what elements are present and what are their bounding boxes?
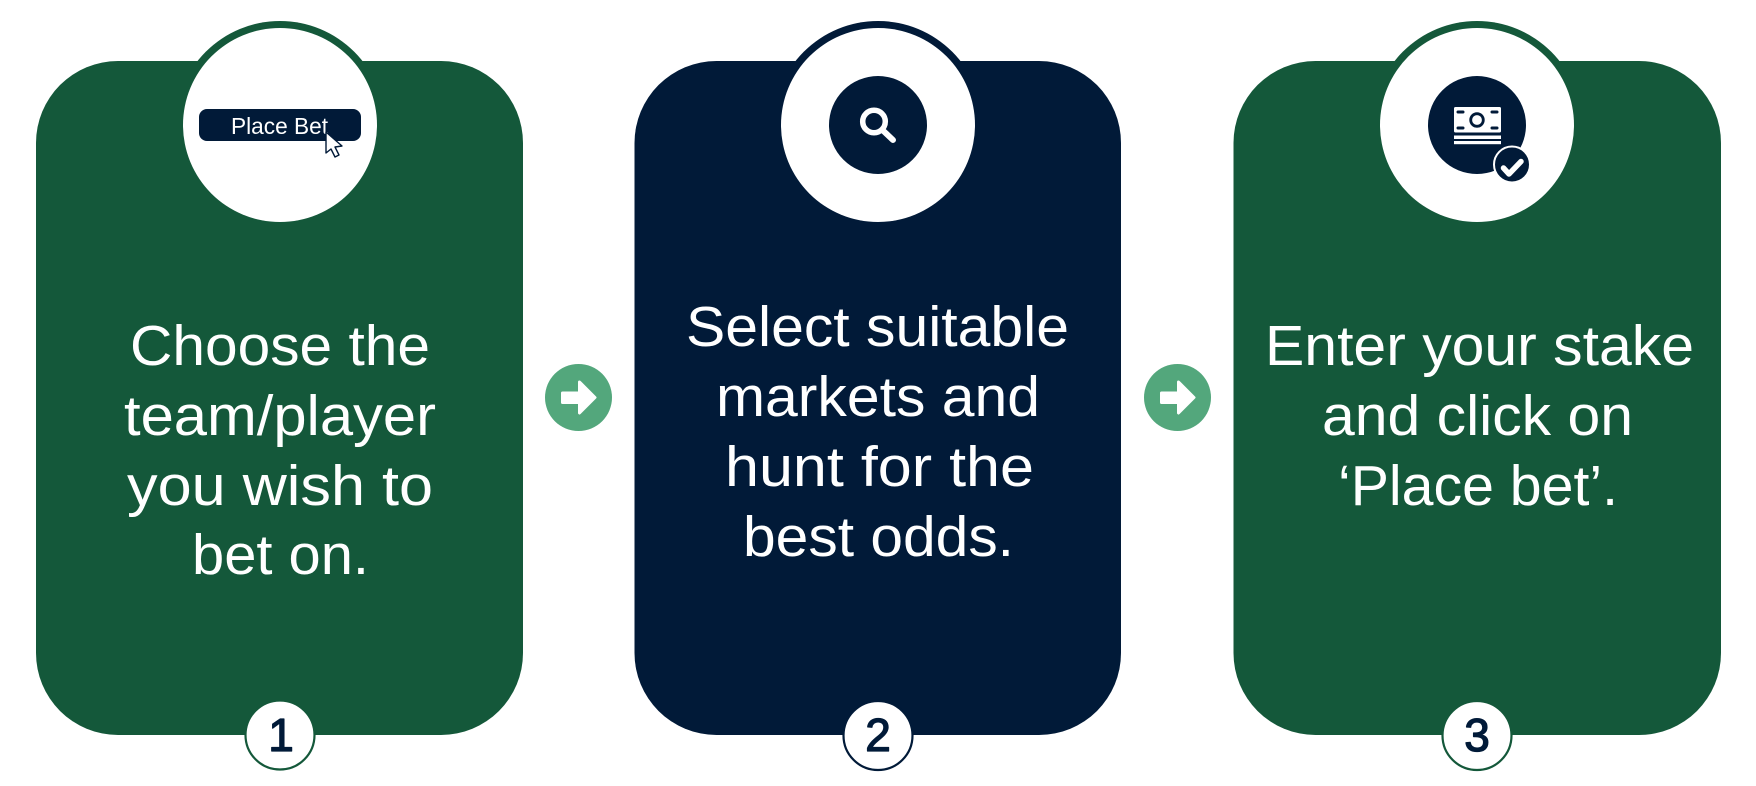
step 1 text: you wish to xyxy=(127,454,433,518)
card background with top ring xyxy=(36,21,523,735)
card background with top ring xyxy=(634,21,1121,735)
step 2 text: markets and xyxy=(716,365,1040,429)
step 1 text: Choose the xyxy=(130,314,430,378)
number badge 2 xyxy=(844,701,912,770)
panel: step 1 xyxy=(36,21,523,770)
number badge 1 xyxy=(246,700,314,770)
number badge 3 xyxy=(1442,701,1512,770)
icon: place bet button: Place Bet xyxy=(231,113,329,139)
step 2 text: hunt for the xyxy=(725,435,1034,499)
step 2 text xyxy=(686,295,1069,569)
card background with top ring xyxy=(1234,21,1721,735)
step 3 text xyxy=(1265,314,1694,518)
step 2 text: Select suitable xyxy=(686,295,1069,359)
number badge 1: 1 xyxy=(268,709,294,761)
step 3 text: and click on xyxy=(1322,384,1633,448)
icon: banknotes with check xyxy=(1380,28,1574,222)
panel: step 3 xyxy=(1234,21,1721,770)
step 1 text xyxy=(124,314,436,587)
number badge 2: 2 xyxy=(865,709,891,761)
step 2 text: best odds. xyxy=(743,505,1014,569)
panel: step 2 xyxy=(634,21,1121,770)
step 1 text: team/player xyxy=(124,384,436,448)
arrow: step 1 to step 2 xyxy=(545,364,612,431)
step 3 text: ‘Place bet’. xyxy=(1338,454,1618,518)
number badge 3: 3 xyxy=(1464,709,1490,761)
step 1 text: bet on. xyxy=(192,523,369,587)
icon: place bet button xyxy=(183,28,377,222)
step 3 text: Enter your stake xyxy=(1265,314,1694,378)
icon: magnifying glass xyxy=(781,28,975,222)
arrow: step 2 to step 3 xyxy=(1144,364,1211,431)
